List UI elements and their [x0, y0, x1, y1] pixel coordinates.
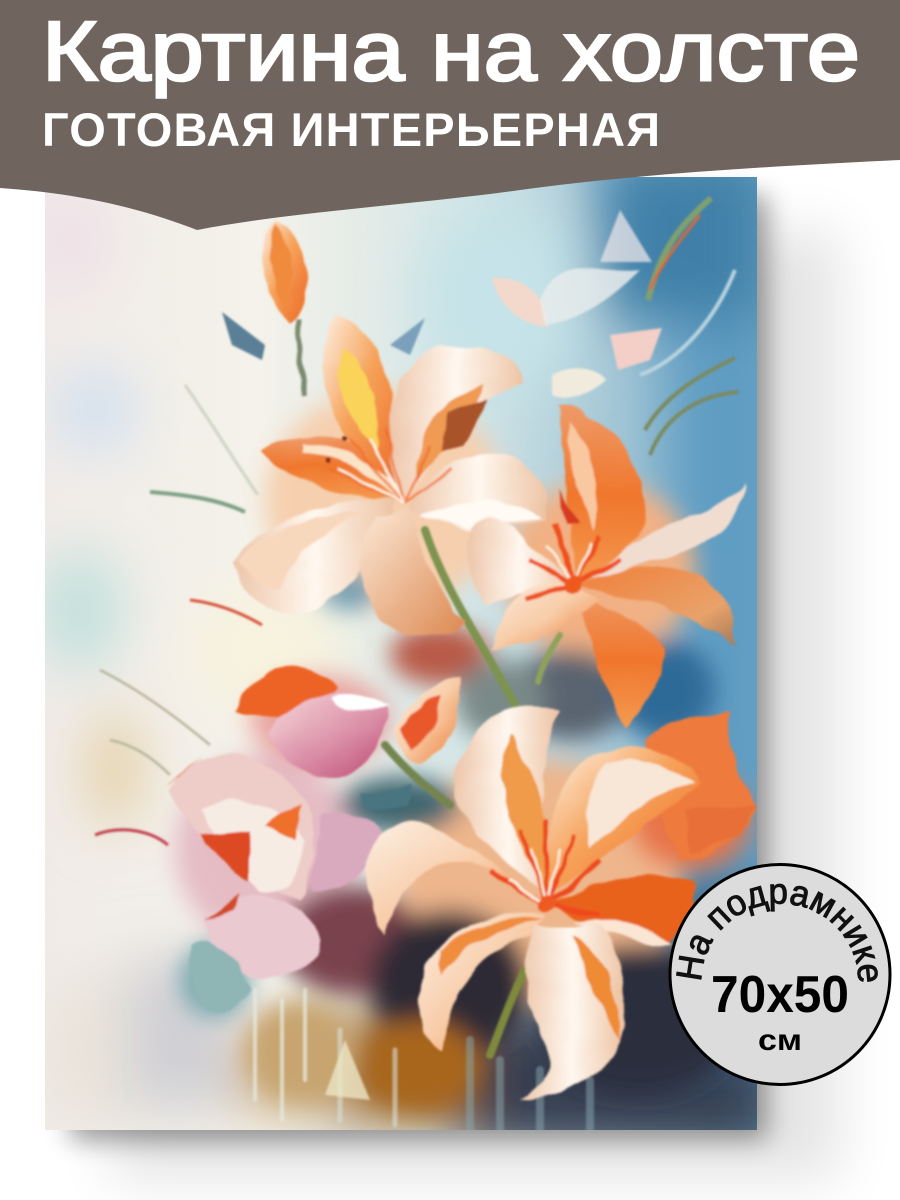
flower: pink group — [165, 666, 462, 1010]
flower: lower lily — [366, 704, 757, 1098]
paint drips — [252, 988, 595, 1130]
subtitle: ГОТОВАЯ ИНТЕРЬЕРНАЯ — [42, 103, 660, 156]
badge arc text: На подрамнике — [676, 884, 878, 982]
banner — [0, 0, 900, 230]
painted masses under the flowers — [175, 390, 750, 1110]
title: Картина на холсте — [42, 4, 860, 98]
flower: right lily — [467, 405, 746, 728]
canvas shadow — [70, 195, 840, 1180]
badge size: 70x50 — [711, 966, 849, 1024]
badge unit: см — [758, 1024, 802, 1057]
stems — [385, 530, 560, 1055]
badge: size on stretcher — [668, 863, 892, 1086]
bud: top — [263, 218, 308, 395]
painting: lilies on canvas — [30, 150, 780, 1150]
painting background — [30, 150, 780, 1150]
upper right loose petals and strokes — [95, 198, 738, 845]
flower: upper lily — [235, 315, 548, 636]
